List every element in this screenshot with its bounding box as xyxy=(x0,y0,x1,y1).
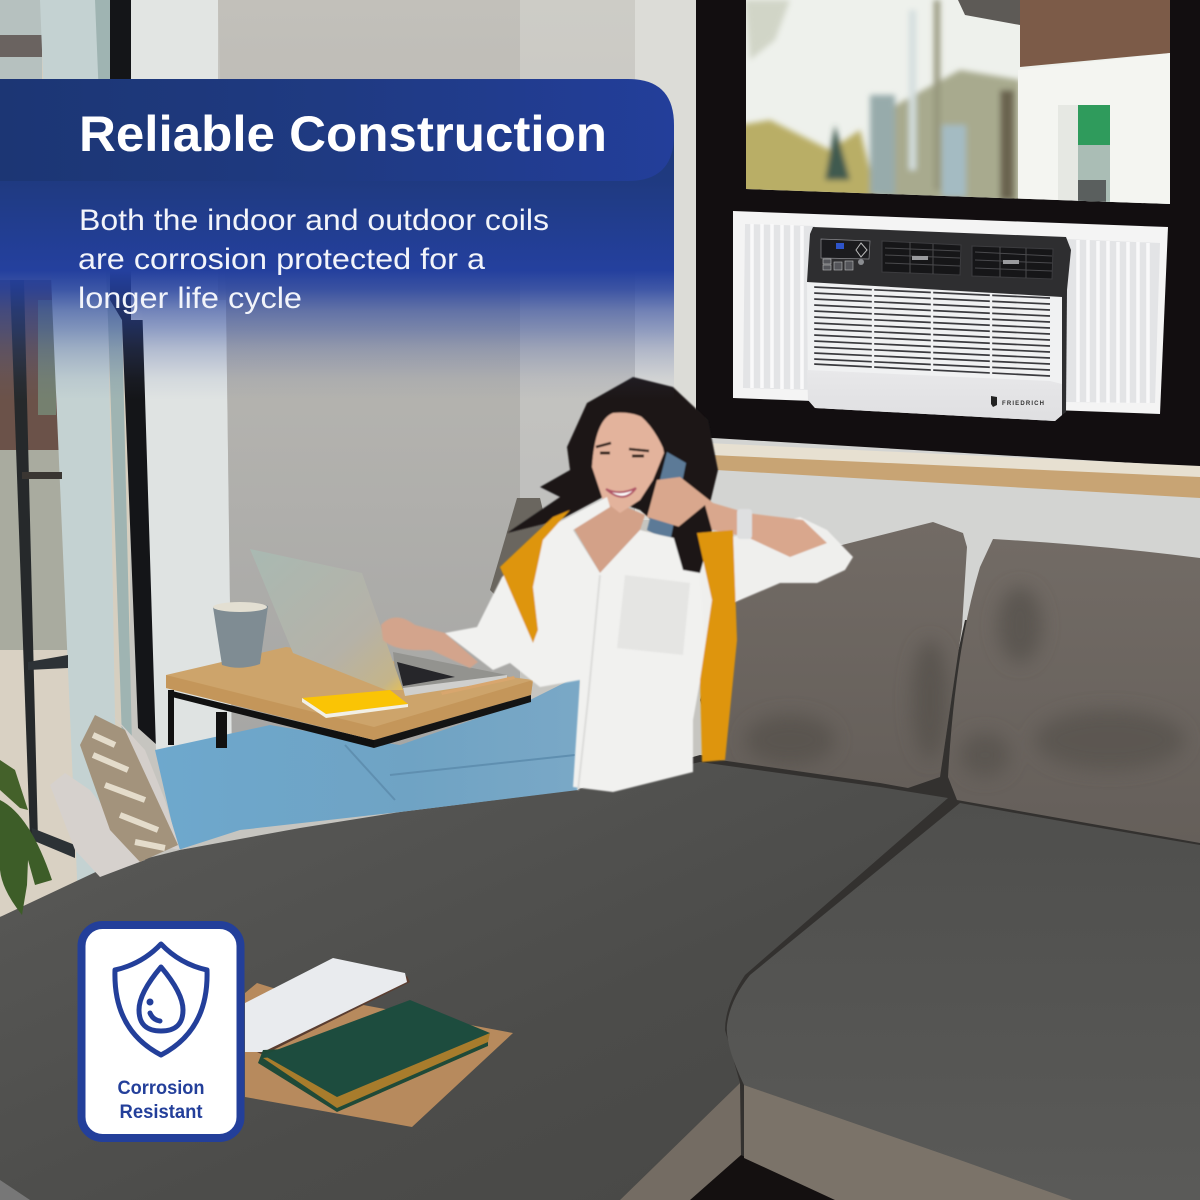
badge label xyxy=(118,1078,204,1123)
side table with laptop xyxy=(166,549,533,748)
outside view xyxy=(740,0,1180,210)
AC unit xyxy=(807,227,1071,421)
FRIEDRICH logo xyxy=(991,396,1044,407)
right seat cushion xyxy=(727,803,1200,1200)
view outside left window xyxy=(0,0,132,950)
body text: are corrosion protected for a xyxy=(78,243,485,276)
AC louvers xyxy=(813,287,1050,376)
body text xyxy=(78,204,549,315)
table top xyxy=(166,647,533,740)
white notebook xyxy=(245,958,410,1055)
white shirt xyxy=(445,497,853,792)
control panel xyxy=(821,239,870,270)
FRIEDRICH logo: FRIEDRICH xyxy=(1002,401,1044,407)
books on sofa xyxy=(245,958,513,1127)
yellow notepad xyxy=(302,690,408,718)
plant xyxy=(0,760,52,915)
left window frame xyxy=(110,0,157,745)
heading: Reliable Construction xyxy=(79,106,607,162)
green book xyxy=(258,1000,490,1112)
badge label: Resistant xyxy=(120,1102,203,1123)
table legs xyxy=(168,690,374,748)
badge: corrosion resistant xyxy=(82,925,240,1138)
wall panels xyxy=(131,0,218,320)
hair over shoulder xyxy=(672,505,712,573)
floor xyxy=(690,1155,835,1200)
pencil xyxy=(441,676,515,695)
AC side trim panels xyxy=(733,211,1168,414)
neck and chest xyxy=(573,500,645,573)
cushion back left xyxy=(490,498,555,620)
window sill xyxy=(706,443,1200,498)
watch xyxy=(737,509,752,539)
body text: longer life cycle xyxy=(78,282,302,315)
mug xyxy=(213,602,268,668)
hair front xyxy=(590,382,672,452)
back cushion right xyxy=(948,539,1200,843)
sofa xyxy=(0,498,1200,1200)
sofa shadow base xyxy=(0,620,1200,1200)
window with air conditioner xyxy=(696,0,1200,498)
laptop xyxy=(250,549,507,696)
jeans xyxy=(155,675,580,850)
AC vents xyxy=(882,241,1053,279)
icon: shield with water drop xyxy=(115,944,207,1055)
blue text overlay panel xyxy=(0,79,674,400)
sofa base xyxy=(744,1085,1072,1200)
badge label: Corrosion xyxy=(118,1078,204,1099)
face xyxy=(592,413,664,513)
mustard sweater xyxy=(500,510,737,762)
right arm and hand xyxy=(647,477,827,557)
back cushion middle xyxy=(700,522,967,788)
hair back xyxy=(507,377,718,573)
shoes xyxy=(50,712,180,877)
heading bar xyxy=(0,79,674,181)
chaise seat xyxy=(0,762,948,1200)
woman xyxy=(381,377,853,792)
body text: Both the indoor and outdoor coils xyxy=(79,204,549,237)
cardboard folder xyxy=(245,983,513,1127)
left forearm and hand xyxy=(381,618,478,668)
phone xyxy=(647,452,686,542)
